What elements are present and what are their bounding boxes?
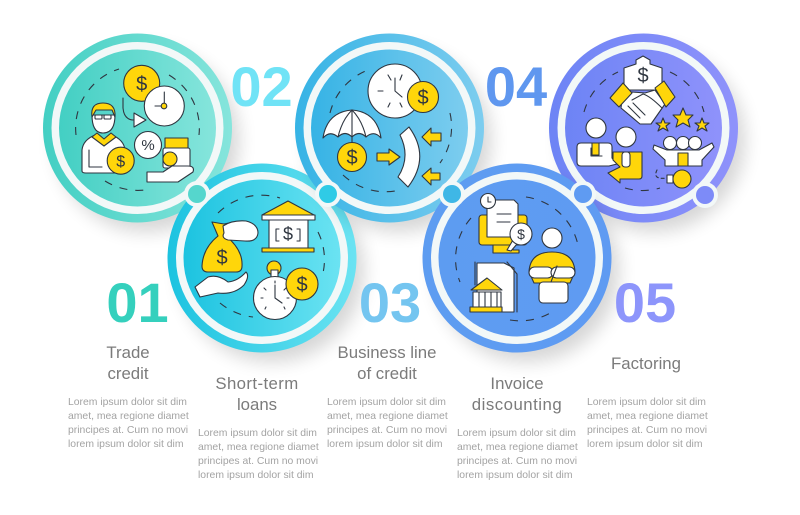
title: business line of credit: Business line [338, 343, 436, 362]
body text 1: amet, mea regione diamet [68, 411, 189, 422]
body text 2: lorem ipsum dolor sit dim [198, 470, 313, 481]
icon: percent and money on hand: % [141, 137, 155, 154]
panel: circle 4 invoice discounting [422, 164, 619, 362]
icon: coin and clock [123, 65, 184, 127]
icon: monitor and invoice: $ [517, 226, 525, 242]
title: business line of credit: of credit [357, 364, 417, 383]
number 01: 01 [106, 271, 169, 334]
icon: person with basket [529, 228, 575, 303]
icon: money bag held by hand: $ [216, 247, 228, 269]
panel: circle 1 trade credit [43, 34, 239, 232]
body text 4: principes at. Cum no movi [457, 456, 577, 467]
title: invoice discounting: discounting [472, 395, 562, 414]
body text 5: lorem ipsum dolor sit dim [587, 439, 702, 450]
icon: monitor and invoice [479, 194, 532, 253]
connector dot 2 [315, 181, 341, 207]
body text 4: lorem ipsum dolor sit dim [457, 470, 572, 481]
connector dot 4 [570, 181, 596, 207]
icon: stopwatch and coin [254, 261, 318, 320]
body text 4: Lorem ipsum dolor sit dim [457, 428, 576, 439]
body text 1: lorem ipsum dolor sit dim [68, 439, 183, 450]
title: trade credit: credit [107, 364, 149, 383]
icon: arrows and curved shield [377, 127, 441, 187]
icon: percent and money on hand [134, 132, 193, 182]
body text 2: Lorem ipsum dolor sit dim [198, 428, 317, 439]
body text 1: Lorem ipsum dolor sit dim [68, 397, 187, 408]
panel: circle 5 factoring [549, 34, 745, 232]
body text 5: amet, mea regione diamet [587, 411, 708, 422]
connector dot 1 [184, 181, 210, 207]
icon: clock and coin [368, 64, 438, 118]
icon: stopwatch and coin: $ [296, 274, 308, 296]
icon: documents and bank [470, 262, 517, 312]
icon: stars and team [653, 108, 714, 188]
icon: umbrella and coin: $ [346, 147, 358, 169]
icon: two people exchanging [577, 118, 642, 183]
icon: man with coin [82, 103, 134, 174]
number 04: 04 [485, 55, 547, 118]
icon: clock and coin: $ [417, 87, 429, 109]
icon: handshake and shield: $ [637, 65, 649, 87]
body text 2: amet, mea regione diamet [198, 442, 319, 453]
body text 4: amet, mea regione diamet [457, 442, 578, 453]
body text 5: principes at. Cum no movi [587, 425, 707, 436]
body text 1: principes at. Cum no movi [68, 425, 188, 436]
icon: bank: $ [283, 224, 293, 244]
connector dot 5 [692, 182, 718, 208]
number 05: 05 [614, 271, 676, 334]
title: factoring: Factoring [611, 354, 681, 373]
icon: bank [262, 201, 315, 252]
body text 3: amet, mea regione diamet [327, 411, 448, 422]
body text 5: Lorem ipsum dolor sit dim [587, 397, 706, 408]
number 03: 03 [359, 271, 421, 334]
title: trade credit: Trade [106, 343, 150, 362]
title: invoice discounting: Invoice [490, 374, 544, 393]
number 02: 02 [230, 55, 293, 118]
body text 3: principes at. Cum no movi [327, 425, 447, 436]
panel: circle 2 short-term loans [168, 164, 364, 362]
body text 3: Lorem ipsum dolor sit dim [327, 397, 446, 408]
icon: man with coin: $ [116, 154, 125, 170]
title: short-term loans: Short-term [215, 374, 299, 393]
connector dot 3 [439, 181, 465, 207]
icon: money bag held by hand [195, 221, 258, 297]
body text 2: principes at. Cum no movi [198, 456, 318, 467]
icon: handshake and shield [610, 56, 675, 124]
icon: coin and clock: $ [136, 74, 147, 96]
icon: umbrella and coin [323, 110, 381, 172]
panel: circle 3 business line of credit [295, 34, 491, 232]
body text 3: lorem ipsum dolor sit dim [327, 439, 442, 450]
title: short-term loans: loans [237, 395, 277, 414]
